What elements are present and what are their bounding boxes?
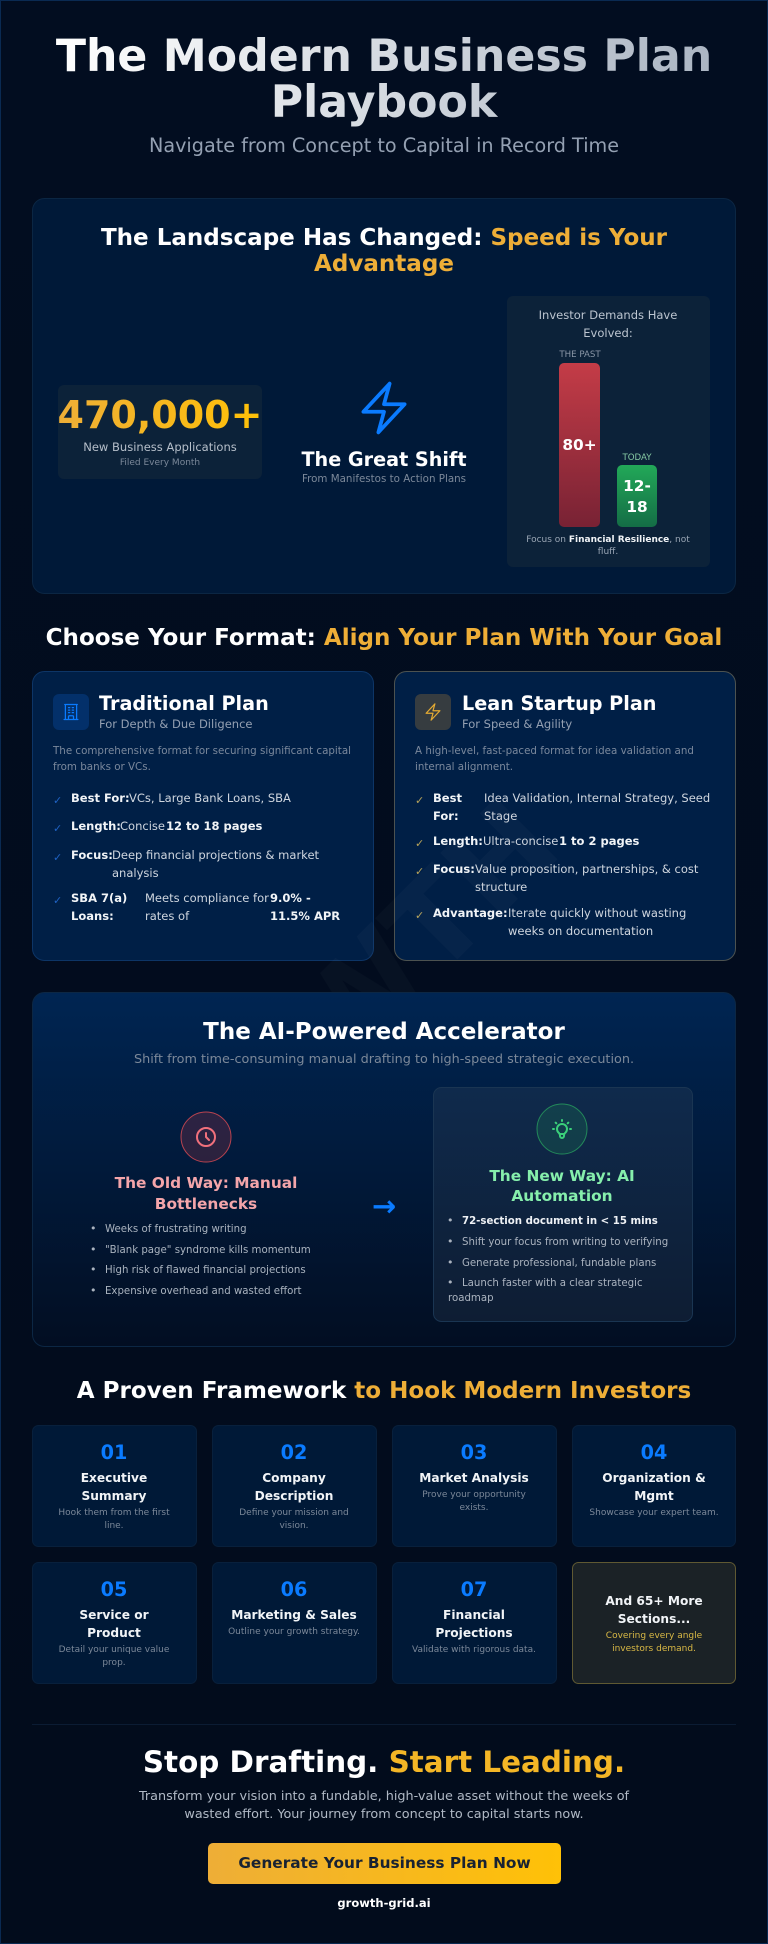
traditional feature list: Best For:: [71, 791, 130, 805]
AI heading: [134, 1019, 634, 1067]
landscape heading: Advantage: [314, 251, 454, 277]
panel: investor demands: Evolved:: [583, 326, 633, 340]
new way list: roadmap: [448, 1293, 494, 1304]
bar caption: fluff.: [598, 547, 618, 557]
traditional feature list: ✓: [53, 822, 62, 835]
lean feature list: ✓: [415, 865, 424, 878]
framework heading: A Proven Framework to Hook Modern Investors: [77, 1378, 691, 1404]
lean feature list: ✓: [415, 837, 424, 850]
icon: small bolt: [426, 704, 440, 720]
column: new way: [434, 1088, 692, 1322]
the great shift: From Manifestos to Action Plans: [302, 473, 466, 485]
lean feature list: 1 to 2 pages: [559, 834, 640, 848]
lean feature list: structure: [475, 880, 527, 894]
icon: clock: [181, 1112, 231, 1162]
panel: lean startup plan: Lean Startup Plan: [462, 692, 656, 715]
card: more sections: Covering every angle: [606, 1631, 703, 1641]
stat: applications: 470,000+: [58, 393, 262, 437]
card 04: Showcase your expert team.: [589, 1508, 719, 1518]
traditional feature list: Focus:: [71, 848, 113, 862]
old way list: High risk of flawed financial projections: [105, 1265, 306, 1276]
column: new way: The New Way: AI: [489, 1167, 635, 1185]
footer text: [138, 1789, 630, 1822]
card 04: 04: [641, 1441, 667, 1464]
lean feature list: Focus:: [433, 862, 475, 876]
old way list: •: [90, 1222, 96, 1235]
bar: today: 12-: [623, 477, 651, 495]
traditional feature list: Length:: [71, 819, 121, 833]
card 04: Organization &: [602, 1471, 706, 1485]
card 03: [392, 1426, 556, 1546]
lean feature list: weeks on documentation: [508, 924, 653, 938]
card: more sections: And 65+ More: [605, 1594, 703, 1608]
footer text: Transform your vision into a fundable, high-value asset without the weeks of: [138, 1789, 630, 1804]
card 01: Hook them from the first: [58, 1508, 170, 1518]
panel: lean startup plan: internal alignment.: [415, 761, 513, 773]
card 07: Financial: [443, 1608, 505, 1622]
card 02: vision.: [279, 1521, 309, 1531]
lean feature list: Stage: [484, 809, 517, 823]
card 05: prop.: [102, 1658, 126, 1668]
traditional feature list: ✓: [53, 894, 62, 907]
lean feature list: Length:: [433, 834, 483, 848]
panel: investor demands: Investor Demands Have: [539, 308, 677, 322]
button: [208, 1843, 561, 1884]
bar caption: [526, 535, 690, 557]
panel: AI accelerator: [32, 992, 736, 1346]
lean feature list: ✓: [415, 909, 424, 922]
card 07: 07: [461, 1578, 487, 1601]
panel: lean startup plan: A high-level, fast-paced format for idea validation and: [415, 745, 694, 757]
lean feature list: Iterate quickly without wasting: [508, 906, 686, 920]
traditional feature list: rates of: [145, 909, 190, 923]
card 05: Service or: [79, 1608, 149, 1622]
bar: the past: [558, 350, 601, 527]
traditional feature list: Deep financial projections & market: [112, 848, 320, 862]
AI heading: The AI-Powered Accelerator: [203, 1019, 565, 1045]
card 06: Marketing & Sales: [231, 1608, 357, 1622]
old way list: "Blank page" syndrome kills momentum: [105, 1245, 311, 1256]
bar caption: Focus on Financial Resilience, not: [526, 535, 690, 545]
column: new way: Automation: [511, 1187, 613, 1205]
bar: the past: THE PAST: [558, 350, 601, 360]
traditional feature list: Concise: [120, 819, 165, 833]
old way list: Expensive overhead and wasted effort: [105, 1286, 302, 1297]
card 03: exists.: [460, 1503, 488, 1513]
format heading: Choose Your Format: Align Your Plan With Your Goal: [46, 625, 722, 651]
title: The Modern Business Plan: [56, 31, 712, 82]
card 03: Market Analysis: [419, 1471, 529, 1485]
new way list: [447, 1214, 668, 1304]
card 01: line.: [104, 1521, 124, 1531]
new way list: Shift your focus from writing to verifying: [462, 1237, 668, 1248]
old way list: •: [90, 1263, 96, 1276]
card 02: [212, 1426, 376, 1546]
new way list: •: [447, 1235, 454, 1248]
stat: applications: New Business Applications: [83, 440, 237, 454]
card 01: Summary: [81, 1489, 147, 1503]
panel: investor demands: [507, 296, 710, 567]
column: old way: [90, 1112, 311, 1297]
card 01: 01: [101, 1441, 127, 1464]
stat: applications: Filed Every Month: [120, 458, 200, 468]
column: old way: The Old Way: Manual: [115, 1174, 297, 1192]
card 02: Company: [262, 1471, 326, 1485]
traditional feature list: 11.5% APR: [270, 909, 340, 923]
card 06: 06: [281, 1578, 307, 1601]
card: more sections: Sections...: [618, 1612, 690, 1626]
card 07: [392, 1562, 556, 1684]
traditional feature list: analysis: [112, 866, 159, 880]
new way list: •: [447, 1276, 454, 1289]
lean feature list: Idea Validation, Internal Strategy, Seed: [484, 791, 710, 805]
footer text: wasted effort. Your journey from concept to capital starts now.: [184, 1807, 584, 1822]
old way list: •: [90, 1243, 96, 1256]
panel: traditional plan: The comprehensive format for securing significant capital: [52, 745, 351, 757]
lean feature list: Advantage:: [433, 906, 508, 920]
title: [56, 31, 712, 128]
card 07: Validate with rigorous data.: [412, 1645, 536, 1655]
traditional feature list: [53, 791, 340, 923]
icon: lightning bolt: [363, 384, 405, 432]
traditional feature list: 9.0% -: [270, 891, 311, 905]
card 04: [572, 1426, 736, 1546]
column: old way: Bottlenecks: [155, 1195, 257, 1213]
traditional feature list: ✓: [53, 794, 62, 807]
new way list: Launch faster with a clear strategic: [462, 1278, 643, 1289]
bar: the past: 80+: [562, 436, 597, 454]
lean feature list: Best: [433, 791, 462, 805]
the great shift: The Great Shift: [301, 448, 467, 471]
subtitle: Navigate from Concept to Capital in Record Time: [149, 134, 619, 157]
arrow: →: [372, 1189, 396, 1223]
footer heading: Stop Drafting. Start Leading.: [143, 1745, 625, 1779]
button: Generate Your Business Plan Now: [238, 1854, 531, 1872]
card 06: Outline your growth strategy.: [228, 1627, 360, 1637]
card: more sections: [572, 1562, 736, 1684]
card 01: Executive: [81, 1471, 147, 1485]
panel: traditional plan: Traditional Plan: [99, 692, 269, 715]
icon: building: [64, 704, 78, 719]
title: Playbook: [271, 77, 499, 128]
lean feature list: Value proposition, partnerships, & cost: [475, 862, 699, 876]
traditional feature list: SBA 7(a): [71, 891, 127, 905]
card 05: 05: [101, 1578, 127, 1601]
panel: traditional plan: from banks or VCs.: [53, 761, 151, 773]
card 07: Projections: [435, 1626, 513, 1640]
panel: traditional plan: [32, 672, 374, 960]
card 02: Description: [255, 1489, 333, 1503]
card 04: Mgmt: [634, 1489, 674, 1503]
new way list: 72-section document in < 15 mins: [462, 1216, 658, 1227]
card 06: [212, 1562, 376, 1684]
traditional feature list: VCs, Large Bank Loans, SBA: [129, 791, 291, 805]
traditional feature list: ✓: [53, 851, 62, 864]
traditional feature list: Meets compliance for: [145, 891, 269, 905]
card: more sections: investors demand.: [612, 1644, 696, 1654]
watermark: GROWTH: [58, 774, 586, 1302]
old way list: •: [90, 1284, 96, 1297]
panel: traditional plan: For Depth & Due Diligence: [99, 717, 253, 731]
card 05: Product: [87, 1626, 141, 1640]
lean feature list: [415, 791, 710, 938]
new way list: •: [447, 1256, 454, 1269]
bar: today: 18: [626, 498, 648, 516]
lean feature list: Ultra-concise: [483, 834, 558, 848]
card 02: Define your mission and: [239, 1508, 349, 1518]
footer link: growth-grid.ai: [337, 1896, 431, 1910]
framework grid: [32, 1426, 736, 1684]
bar: today: TODAY: [621, 453, 652, 463]
landscape heading: The Landscape Has Changed: Speed is Your: [101, 225, 668, 251]
card 05: Detail your unique value: [59, 1645, 170, 1655]
card 02: 02: [281, 1441, 307, 1464]
panel: lean startup plan: For Speed & Agility: [462, 717, 572, 731]
panel: lean startup plan: [394, 672, 736, 960]
card 03: Prove your opportunity: [422, 1490, 526, 1500]
card 03: 03: [461, 1441, 487, 1464]
AI heading: Shift from time-consuming manual drafting to high-speed strategic execution.: [134, 1052, 634, 1067]
the great shift: [301, 448, 467, 485]
card 01: [32, 1426, 196, 1546]
new way list: Generate professional, fundable plans: [462, 1258, 656, 1269]
traditional feature list: Loans:: [71, 909, 114, 923]
bar: today: [617, 453, 657, 527]
old way list: [90, 1222, 311, 1297]
old way list: Weeks of frustrating writing: [105, 1224, 247, 1235]
stat: applications: [58, 385, 262, 479]
panel: landscape: [32, 198, 736, 594]
landscape heading: [101, 225, 668, 277]
lean feature list: ✓: [415, 794, 424, 807]
card 05: [32, 1562, 196, 1684]
traditional feature list: 12 to 18 pages: [166, 819, 263, 833]
icon: lightbulb: [537, 1104, 587, 1154]
new way list: •: [447, 1214, 454, 1227]
lean feature list: For:: [433, 809, 459, 823]
